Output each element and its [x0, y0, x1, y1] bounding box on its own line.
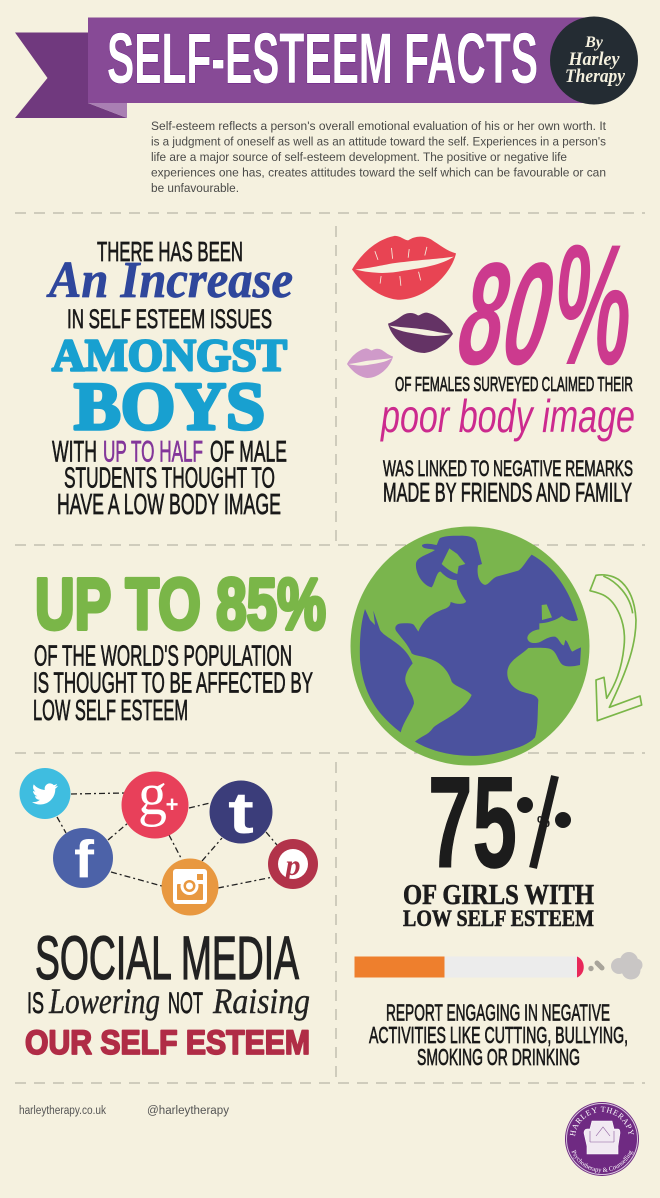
script: an increase: An Increase — [46, 252, 293, 309]
ribbon fold — [88, 103, 127, 118]
badge: by Harley Therapy: Harley — [568, 49, 620, 70]
panel: 75 percent — [354, 749, 642, 1070]
stat: 75%: 75 — [428, 749, 517, 895]
line: with up to half of male: OF MALE — [210, 436, 287, 468]
logo: Harley Therapy seal — [565, 1102, 639, 1176]
intro paragraph — [151, 119, 607, 195]
line: have a low body image: HAVE A LOW BODY IMAGE — [57, 489, 281, 521]
heading: amongst: AMONGST — [52, 330, 287, 380]
line: with up to half of male: UP TO HALF — [103, 436, 203, 468]
line: is lowering not raising: Raising — [212, 981, 310, 1021]
heading: of girls with: OF GIRLS WITH — [403, 879, 594, 911]
stat: 80%: 80 — [451, 233, 561, 396]
heading line: there has been: THERE HAS BEEN — [97, 236, 243, 267]
icon: google plus: + — [166, 792, 178, 817]
icon: tumblr — [210, 780, 272, 846]
badge: by Harley Therapy: Therapy — [565, 66, 626, 87]
panel: body image — [347, 209, 635, 508]
icon: facebook: f — [74, 830, 94, 890]
intro paragraph: is a judgment of oneself as well as an attitude toward the self. Experiences in a person's — [151, 134, 606, 148]
heading: boys: BOYS — [74, 368, 265, 444]
ribbon band — [88, 18, 598, 103]
intro paragraph: be unfavourable. — [151, 181, 239, 195]
icon: google plus: g — [138, 761, 167, 827]
line: is thought to be affected: IS THOUGHT TO BE AFFECTED BY — [33, 668, 313, 700]
icon: tumblr: t — [228, 781, 254, 846]
panel: boys — [46, 236, 293, 521]
line: our self esteem: OUR SELF ESTEEM — [25, 1024, 310, 1062]
icon: purple lips — [388, 313, 453, 353]
line: is lowering not raising: NOT — [168, 987, 203, 1020]
panel: social media — [20, 761, 318, 1062]
icon: facebook — [53, 828, 113, 890]
stat: 75%: % — [537, 814, 550, 831]
intro paragraph: life are a major source of self-esteem development. The positive or negative life — [151, 150, 567, 164]
badge: by Harley Therapy: By — [584, 34, 604, 51]
icon: pinterest — [268, 839, 318, 889]
icon: curved arrow — [590, 575, 642, 721]
icon: pink lips — [347, 348, 393, 378]
ribbon tail — [15, 32, 127, 118]
line: students thought to: STUDENTS THOUGHT TO — [64, 462, 275, 494]
logo: Harley Therapy seal: Psychotherapy & Counselling — [572, 1150, 634, 1174]
line: is lowering not raising: IS — [27, 987, 44, 1020]
line: in self esteem issues: IN SELF ESTEEM ISSUES — [67, 304, 272, 334]
network lines — [57, 793, 277, 888]
icon: pinterest: p — [282, 849, 300, 882]
icon: cigarette — [354, 952, 642, 980]
logo: Harley Therapy seal: HARLEY THERAPY — [570, 1106, 634, 1136]
dashed dividers — [15, 213, 645, 1083]
badge: by Harley Therapy — [550, 16, 638, 104]
line: with up to half of male: WITH — [52, 436, 97, 468]
footer website: harleytherapy.co.uk — [19, 1105, 106, 1117]
line: is lowering not raising: Lowering — [48, 981, 160, 1021]
footer handle: @harleytherapy — [147, 1105, 229, 1117]
intro paragraph: experiences one has, creates attitudes toward the self which can be favourable or can — [151, 166, 606, 180]
icon: twitter — [20, 768, 70, 819]
intro paragraph: Self-esteem reflects a person's overall emotional evaluation of his or her own worth. It — [151, 119, 607, 133]
heading: low self esteem: LOW SELF ESTEEM — [403, 906, 594, 931]
icon: google plus — [122, 761, 188, 838]
line: of the world's population: OF THE WORLD'S POPULATION — [34, 640, 292, 672]
stat: up to 85%: UP TO 85% — [35, 565, 326, 645]
heading: social media: SOCIAL MEDIA — [35, 924, 299, 992]
line: is lowering not raising — [27, 981, 310, 1021]
header ribbon — [15, 16, 638, 118]
panel: world population — [33, 526, 642, 766]
icon: red lips — [352, 236, 456, 300]
icon: instagram — [162, 858, 218, 916]
icon: globe — [350, 526, 590, 766]
line: low self esteem: LOW SELF ESTEEM — [33, 695, 188, 727]
